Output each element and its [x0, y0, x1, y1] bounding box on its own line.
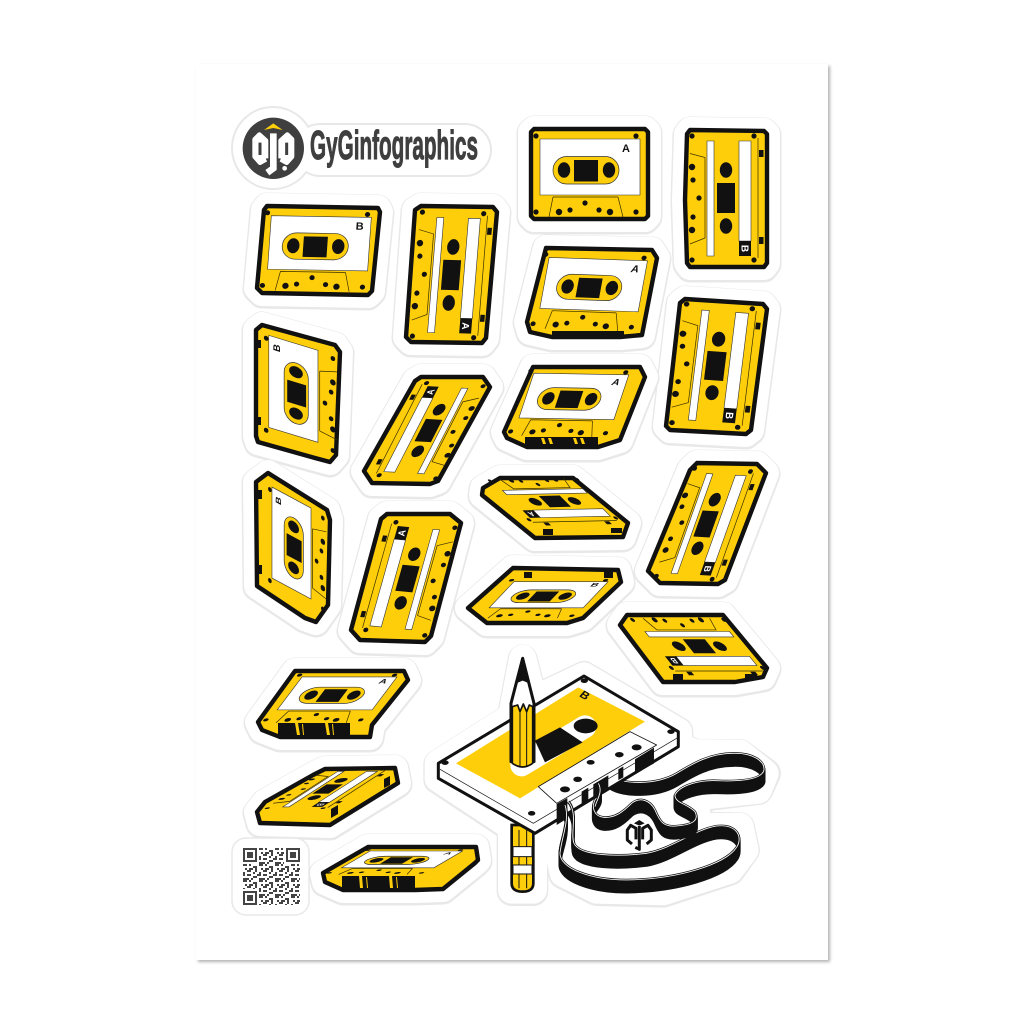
front flap: [538, 732, 657, 803]
side tabs: [331, 776, 390, 818]
tape slots: [278, 723, 350, 735]
sticker: angled cassette side A with slots: A: [377, 678, 390, 685]
mini logo: [627, 820, 651, 849]
sticker: flat cassette side A, centre: [482, 477, 628, 539]
sticker outline: [438, 658, 766, 893]
sticker: flat vertical cassette, lower left: B: [313, 804, 327, 806]
logo wordmark: GyGinfographics: [310, 122, 478, 168]
sticker: skewed vertical cassette side A, centre: A: [396, 529, 408, 537]
flap holes: [441, 678, 675, 816]
tape ribbon upper loop: [593, 753, 764, 838]
sticker: rotated cassette side B, left: B: [273, 343, 283, 354]
sticker: rotated cassette side B, lower left: [256, 473, 330, 623]
ribbon strands leaving the slots: [560, 783, 600, 853]
sticker: skewed vertical cassette side B, right: [648, 463, 766, 585]
sticker: skewed vertical cassette side B, right: B: [701, 565, 713, 573]
sticker: skewed vertical cassette side A: A: [424, 389, 437, 395]
sticker: flat cassette side B, right: B: [668, 656, 680, 665]
sticker: flat cassette side B, centre: B: [588, 582, 601, 587]
lower pencil: [512, 825, 533, 892]
sticker: cassette side A, top centre: A: [622, 143, 630, 155]
side tabs: [258, 340, 261, 425]
sticker: rotated cassette side B, lower left: B: [274, 495, 283, 506]
sticker sheet: [196, 64, 828, 960]
sticker: skewed vertical cassette side A, centre: [351, 514, 461, 643]
sticker: tilted vertical cassette side B: B: [722, 412, 735, 419]
sticker: flat cassette side A, bottom: A: [441, 852, 455, 855]
sticker: flat cassette side A, centre: A: [525, 510, 537, 517]
QR modules: [243, 848, 300, 905]
tape slots: [552, 331, 624, 337]
sticker: GyGinfographics logo: [231, 106, 478, 190]
tape slots: [342, 876, 415, 888]
sticker: vertical cassette side B, top right: [685, 130, 767, 268]
sticker: cassette side A, top centre: [531, 129, 648, 220]
sticker: flat vertical cassette, lower left: [257, 768, 398, 826]
tape slots: [525, 437, 598, 445]
sticker: tilted cassette side A: A: [629, 264, 640, 275]
tape window strip: [522, 727, 585, 765]
sticker: vertical cassette side A: A: [459, 322, 470, 330]
sticker: cassette side B, left: B: [355, 221, 364, 233]
sticker: tilted vertical cassette side B: [666, 299, 767, 435]
sticker: rotated cassette side B, left: [256, 325, 340, 463]
sticker: tilted cassette side A: [527, 248, 657, 338]
tape slots: [557, 748, 654, 825]
sticker: cassette side B, left: [257, 206, 380, 296]
sticker: perspective cassette side A with slots: A: [609, 378, 621, 388]
letter B on label: B: [577, 689, 592, 703]
side tabs: [673, 674, 757, 680]
sticker: flat cassette side A, bottom: [323, 847, 478, 891]
upper pencil: [511, 658, 534, 767]
sticker: skewed vertical cassette side A: [364, 377, 490, 485]
side tabs: [524, 572, 613, 578]
sticker: flat cassette side B, right: [620, 615, 770, 683]
illustration: cassette pierced by pencil with tape loops: [438, 658, 766, 893]
yellow label: [456, 687, 645, 798]
sticker: QR code: [232, 838, 309, 915]
sticker: flat cassette side B, centre: [468, 568, 621, 624]
sticker: vertical cassette side A: [406, 206, 497, 344]
logo mark: [243, 118, 304, 179]
cassette body: [438, 676, 678, 833]
side tabs: [258, 490, 262, 574]
sticker: perspective cassette side A with slots: [504, 367, 645, 448]
side tabs: [543, 528, 622, 535]
sticker: vertical cassette side B, top right: B: [738, 245, 750, 252]
tape ribbon lower loop: [560, 802, 739, 892]
sticker: angled cassette side A with slots: [258, 671, 408, 738]
